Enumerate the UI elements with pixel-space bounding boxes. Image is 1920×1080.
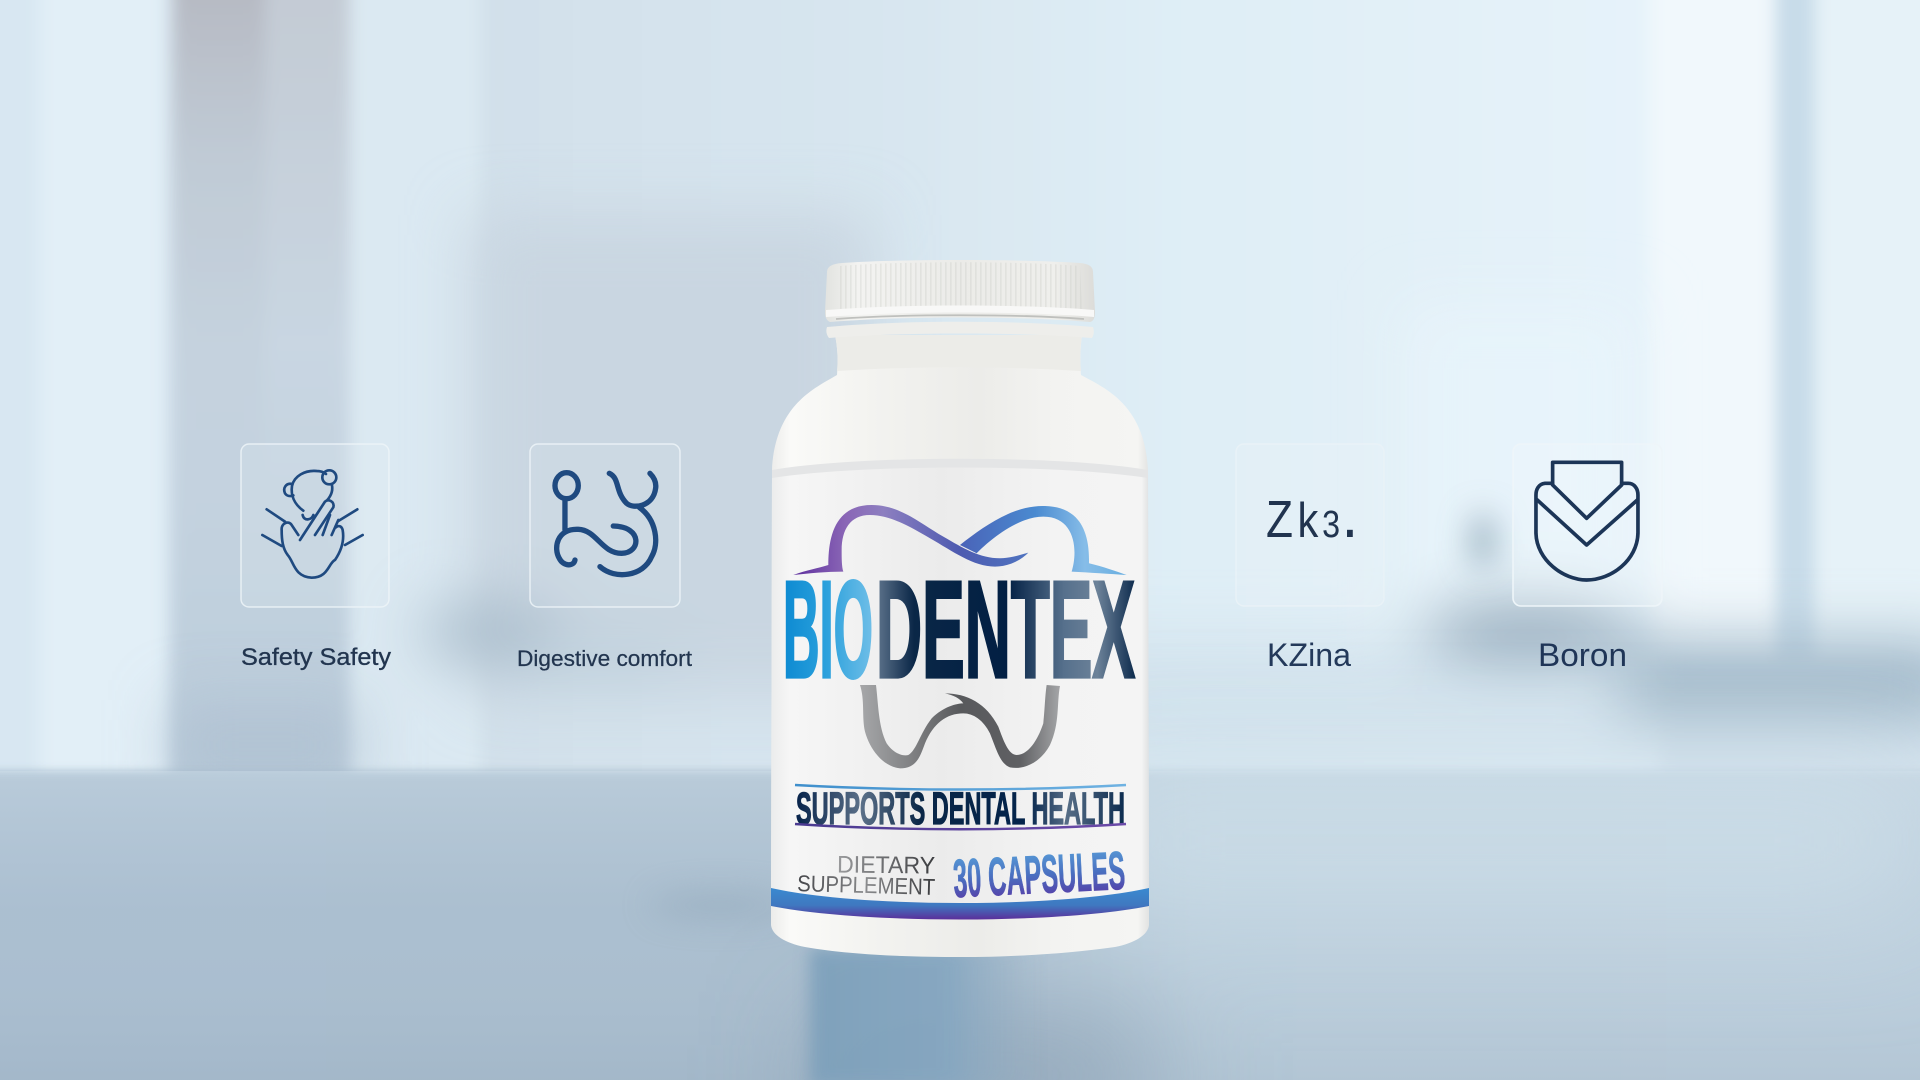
bottle neck shading: [835, 335, 1082, 371]
tagline rule top: [795, 785, 1126, 790]
cap: [825, 260, 1095, 322]
product bottle: [771, 260, 1149, 957]
label: boron: Boron: [1538, 637, 1627, 673]
neck ring: [826, 322, 1094, 338]
logo: tooth top: [793, 505, 1127, 575]
icon text: 3: [1322, 504, 1340, 546]
icon text: .: [1344, 495, 1356, 548]
icon: shield envelope: [1536, 462, 1638, 580]
label panel: [771, 466, 1149, 908]
label: kzina: KZina: [1267, 637, 1351, 673]
logo: tooth bottom: [860, 685, 1060, 768]
icon: stethoscope: [555, 473, 656, 575]
icon text: k: [1297, 493, 1319, 548]
bottle body: [771, 335, 1149, 957]
product bottle: 30 CAPSULES: [952, 841, 1126, 909]
product bottle: BIO: [783, 553, 873, 707]
icon: hand: [262, 470, 363, 578]
dietary text: SUPPLEMENT: [797, 870, 936, 900]
bottle reflection on table: [650, 893, 1040, 1080]
dietary text: DIETARY: [837, 851, 935, 880]
boron icon card: [1513, 444, 1662, 606]
text: DENTEX: [876, 553, 1135, 707]
label top stripe: [772, 459, 1148, 478]
safety icon card: [241, 444, 389, 607]
kzina icon card: [1236, 444, 1384, 606]
label: safety: Safety Safety: [241, 644, 391, 671]
tagline rule bottom: [795, 824, 1126, 829]
tagline: SUPPORTS DENTAL HEALTH: [796, 783, 1125, 834]
icon text: Z: [1266, 491, 1293, 549]
colour band: [771, 888, 1149, 920]
label: digestive comfort: Digestive comfort: [517, 646, 693, 671]
digestive icon card: [530, 444, 680, 607]
dietary text: [797, 851, 936, 900]
